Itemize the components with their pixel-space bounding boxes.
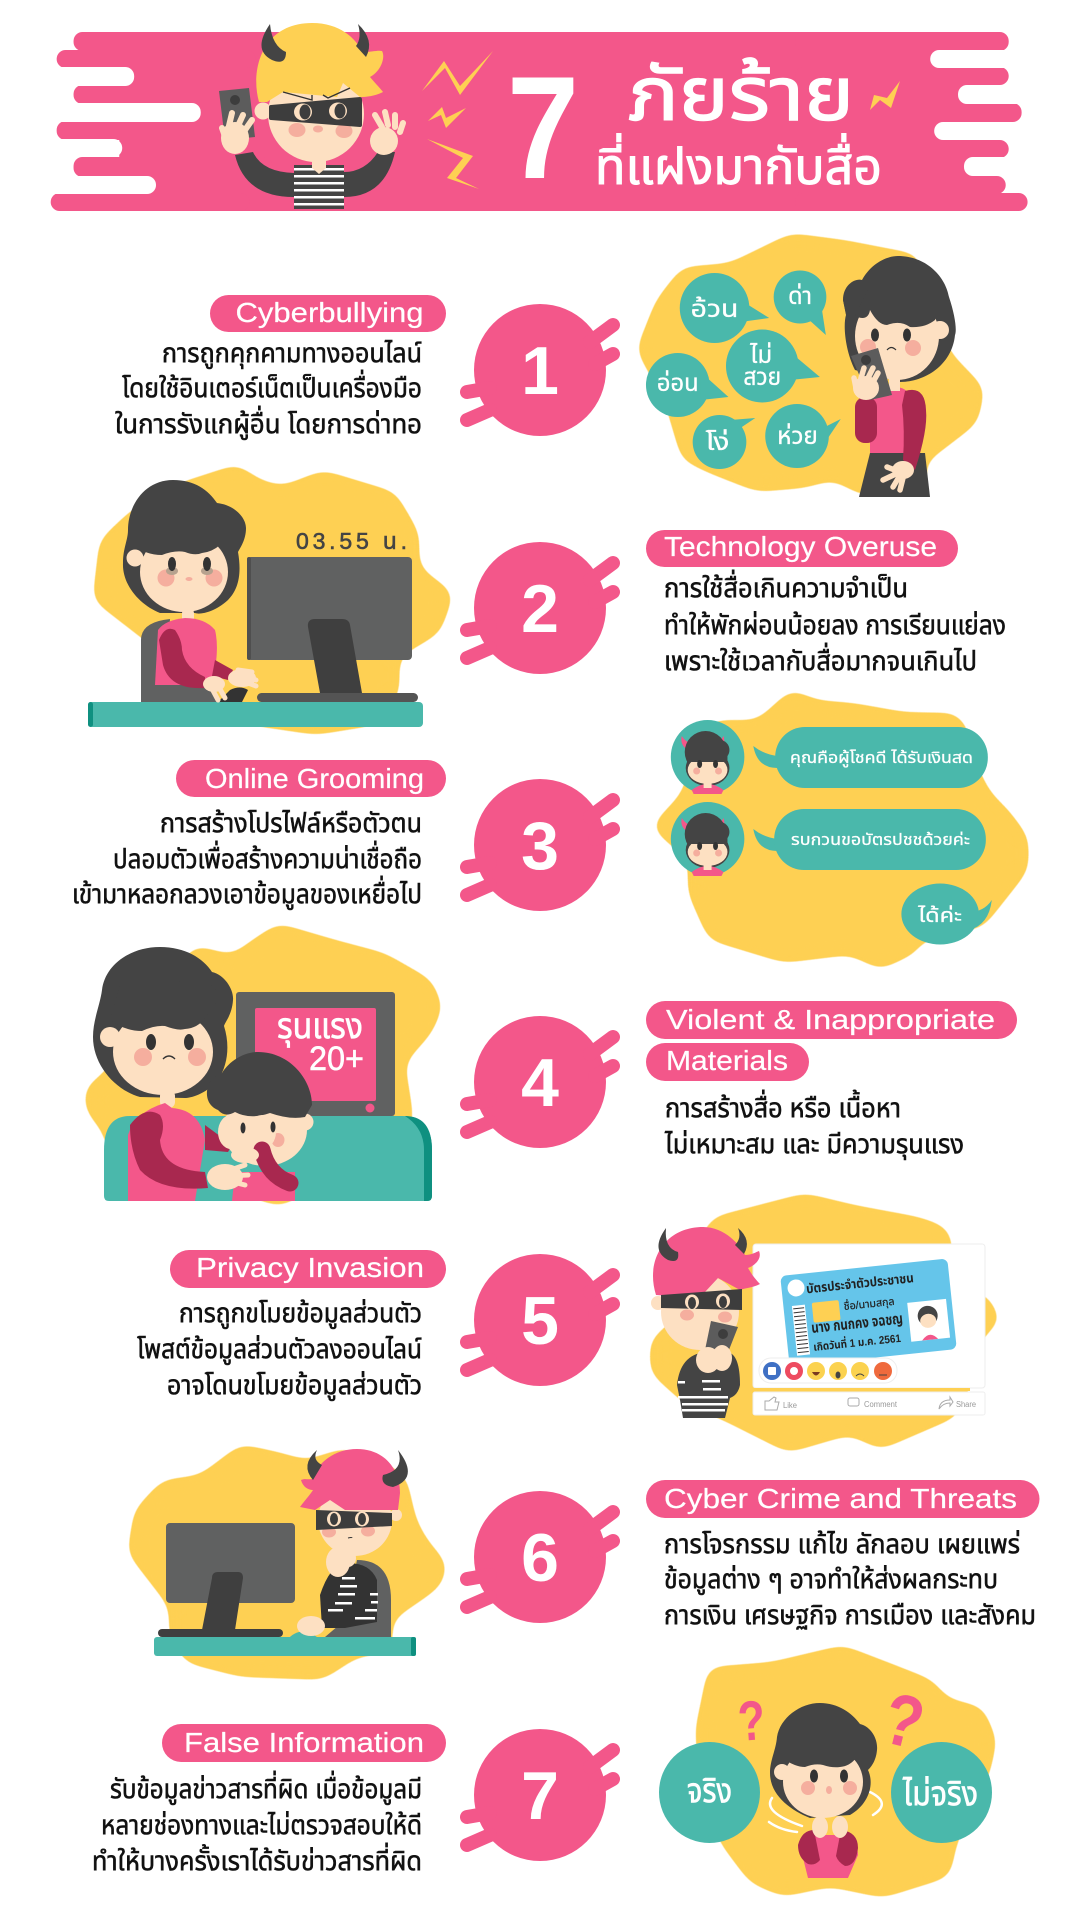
panel 1: Cyberbullying <box>72 233 1040 1898</box>
description: อาจโดนขโมยข้อมูลส่วนตัว <box>167 1370 422 1401</box>
number badge 1 <box>467 304 613 436</box>
panel 3: Online Grooming <box>72 689 1029 970</box>
television: รุนแรง <box>277 1005 363 1047</box>
number badge 2: 2 <box>521 571 559 647</box>
heading pills <box>646 1001 1017 1081</box>
heading pill <box>162 1724 446 1762</box>
panel 7: False Information <box>92 1645 997 1898</box>
yellow blob and insult bubbles: โง่ <box>706 429 729 456</box>
number badge 6 <box>467 1491 613 1623</box>
icon: masked thief with phone <box>219 23 403 209</box>
girl with phone <box>843 256 956 497</box>
number badge 3 <box>467 779 613 911</box>
yellow blob and insult bubbles: สวย <box>743 364 781 391</box>
number badge 3: 3 <box>521 808 559 884</box>
chat bubble 1: คุณคือผู้โชคดี ได้รับเงินสด <box>790 750 973 767</box>
panel 5: Privacy Invasion <box>137 1193 1002 1453</box>
number badge 4 <box>467 1016 613 1148</box>
true circle: จริง <box>687 1772 732 1810</box>
monitor <box>158 1523 295 1637</box>
number badge 7: 7 <box>521 1758 559 1834</box>
social post card: บัตรประจำตัวประชาชน <box>805 1270 914 1296</box>
banner shape <box>0 32 1080 211</box>
heading pill <box>646 530 958 567</box>
number badge 1: 1 <box>521 333 559 409</box>
sofa <box>104 1116 432 1201</box>
desk <box>154 1637 416 1656</box>
big number 7: 7 <box>507 46 579 209</box>
panel 2: Technology Overuse <box>88 464 1006 735</box>
illustration: insults around sad girl <box>636 233 985 497</box>
child <box>207 1052 314 1201</box>
number badge 7 <box>467 1729 613 1861</box>
number badge 4: 4 <box>521 1045 559 1121</box>
illustration: scam chat <box>650 689 1029 970</box>
heading pills: Violent & Inappropriate <box>666 1004 995 1035</box>
social post card <box>753 1244 985 1415</box>
description: การโจรกรรม แก้ไข ลักลอบ เผยแพร่ <box>664 1529 1020 1559</box>
social post card: Like <box>783 1401 798 1410</box>
description: การสร้างสื่อ หรือ เนื้อหา <box>665 1089 901 1123</box>
description <box>664 1529 1036 1630</box>
desk <box>88 702 423 727</box>
avatar 1 <box>671 720 744 794</box>
illustration: mother covers child's eyes <box>85 923 443 1207</box>
hacker <box>287 1449 408 1640</box>
heading pill: Privacy Invasion <box>196 1252 424 1283</box>
description: โดยใช้อินเตอร์เน็ตเป็นเครื่องมือ <box>122 369 422 403</box>
description: การถูกคุกคามทางออนไลน์ <box>162 338 422 369</box>
description: ในการรังแกผู้อื่น โดยการด่าทอ <box>115 405 422 440</box>
girl <box>123 480 256 702</box>
description: รับข้อมูลข่าวสารที่ผิด เมื่อข้อมูลมี <box>110 1770 422 1805</box>
description: ข้อมูลต่าง ๆ อาจทำให้ส่งผลกระทบ <box>664 1564 998 1595</box>
description: ทำให้บางครั้งเราได้รับข่าวสารที่ผิด <box>92 1842 422 1876</box>
yellow blob and insult bubbles: ด่า <box>788 283 812 310</box>
description: ทำให้พักผ่อนน้อยลง การเรียนแย่ลง <box>664 610 1006 640</box>
title line 2: ที่แฝงมากับสื่อ <box>595 133 882 195</box>
description <box>664 569 1006 676</box>
description <box>664 1089 964 1160</box>
illustration: hacker at computer <box>127 1444 447 1680</box>
yellow blob and insult bubbles <box>636 233 985 497</box>
heading pill: False Information <box>184 1727 424 1758</box>
false circle: ไม่จริง <box>902 1775 978 1813</box>
description: ไม่เหมาะสม และ มีความรุนแรง <box>664 1129 964 1160</box>
true circle <box>659 1742 760 1843</box>
social post card: Comment <box>864 1400 898 1409</box>
number badge 5 <box>467 1254 613 1386</box>
description <box>92 1770 422 1876</box>
title line 1: ภัยร้าย <box>628 53 854 136</box>
clock text: 03.55 น. <box>296 528 407 554</box>
number badge 6: 6 <box>521 1520 559 1596</box>
description: การถูกขโมยข้อมูลส่วนตัว <box>179 1298 422 1329</box>
description: ปลอมตัวเพื่อสร้างความน่าเชื่อถือ <box>113 840 422 874</box>
illustration: ID card posted online <box>650 1193 1002 1453</box>
description: การเงิน เศรษฐกิจ การเมือง และสังคม <box>664 1600 1036 1630</box>
question marks <box>736 1678 932 1765</box>
icon: lightning bolts <box>422 51 900 189</box>
social post card: ชื่อ/นามสกุล <box>843 1294 895 1313</box>
yellow blob and insult bubbles: ห่วย <box>777 423 818 450</box>
number badge 2 <box>467 542 613 674</box>
false circle <box>891 1742 992 1843</box>
heading pill: Cyber Crime and Threats <box>664 1483 1017 1514</box>
social post card: เกิดวันที่ 1 ม.ค. 2561 <box>812 1330 902 1354</box>
panel 4: Violent and Inappropriate Materials <box>85 923 1017 1207</box>
description <box>137 1298 422 1401</box>
television <box>236 992 395 1116</box>
heading pill: Technology Overuse <box>664 531 937 562</box>
mother <box>93 947 233 1201</box>
illustration: true or false <box>659 1645 997 1898</box>
description: การใช้สื่อเกินความจำเป็น <box>664 569 908 603</box>
number badge 5: 5 <box>521 1283 559 1359</box>
question marks: ? <box>875 1678 932 1765</box>
description <box>72 808 422 910</box>
description: หลายช่องทางและไม่ตรวจสอบให้ดี <box>101 1810 422 1840</box>
yellow blob and insult bubbles: ไม่ <box>749 342 772 369</box>
chat bubble 2 <box>753 809 986 870</box>
heading pill: Online Grooming <box>205 763 424 794</box>
avatar 2 <box>671 802 744 876</box>
heading pill <box>170 1250 446 1288</box>
television: 20+ <box>309 1040 364 1078</box>
description: การสร้างโปรไฟล์หรือตัวตน <box>160 808 422 838</box>
social post card: Share <box>956 1400 977 1409</box>
illustration: girl at computer at night <box>88 464 454 735</box>
description <box>115 338 422 440</box>
description: โพสต์ข้อมูลส่วนตัวลงออนไลน์ <box>137 1334 422 1365</box>
description: เพราะใช้เวลากับสื่อมากจนเกินไป <box>664 642 977 676</box>
heading pill <box>646 1480 1040 1518</box>
heading pill <box>176 760 446 797</box>
heading pill <box>210 295 446 332</box>
chat bubble 3 <box>901 884 992 944</box>
worried girl <box>769 1703 882 1878</box>
chat bubble 1 <box>753 727 988 788</box>
heading pill: Cyberbullying <box>236 297 424 328</box>
chat bubble 3: ได้ค่ะ <box>917 904 962 927</box>
yellow blob and insult bubbles: อ้วน <box>691 296 738 323</box>
description: เข้ามาหลอกลวงเอาข้อมูลของเหยื่อไป <box>72 875 422 910</box>
yellow blob and insult bubbles: อ่อน <box>657 370 699 397</box>
social post card: นาง กนกคง จฉชญ <box>810 1310 904 1337</box>
chat bubble 2: รบกวนขอบัตรปชชด้วยค่ะ <box>791 831 970 849</box>
heading pills: Materials <box>666 1045 788 1076</box>
header banner <box>0 23 1080 211</box>
question marks: ? <box>736 1688 767 1753</box>
monitor <box>247 557 418 702</box>
thief with phone <box>651 1227 760 1418</box>
panel 6: Cyber Crime and Threats <box>127 1444 1039 1680</box>
